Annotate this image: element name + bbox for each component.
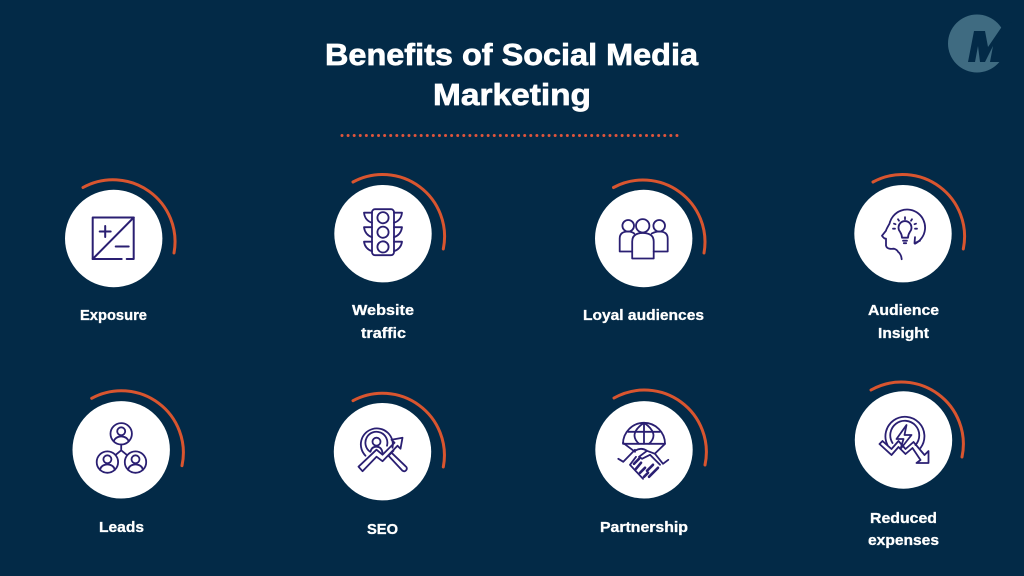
- item: Exposure: [65, 180, 175, 324]
- item: Reduced expenses: [855, 382, 963, 549]
- dotted divider: [342, 134, 677, 137]
- icon: falling cost chart: [880, 417, 928, 463]
- item: Reduced expenses: expenses: [868, 533, 939, 549]
- icon: plus minus: [93, 218, 134, 259]
- item: Website traffic: Website: [352, 303, 414, 319]
- item: Partnership: Partnership: [600, 520, 688, 536]
- icon: globe and handshake: [618, 423, 668, 479]
- item: SEO: [334, 393, 444, 538]
- item: Partnership: [595, 390, 706, 536]
- item: Loyal audiences: [583, 180, 705, 324]
- item: Reduced expenses: Reduced: [870, 511, 937, 527]
- item: Loyal audiences: Loyal audiences: [583, 308, 704, 324]
- title: Benefits of Social Media: [325, 37, 699, 72]
- item: SEO: SEO: [367, 522, 398, 538]
- item: Leads: [72, 391, 183, 536]
- item: Website traffic: traffic: [361, 326, 406, 342]
- item: Exposure: Exposure: [80, 308, 147, 324]
- item: Leads: Leads: [99, 520, 144, 536]
- icon: traffic light: [364, 209, 402, 255]
- icon: connected contacts: [97, 423, 146, 473]
- title: Marketing: [433, 77, 591, 112]
- item: Audience Insight: Audience: [868, 303, 939, 319]
- icon: target and growth arrow: [358, 428, 407, 471]
- item: Audience Insight: Insight: [878, 326, 929, 342]
- logo: [948, 14, 1012, 72]
- icon: head with bulb: [882, 210, 925, 259]
- item: Audience Insight: [854, 174, 965, 342]
- title: [325, 37, 699, 112]
- item: Website traffic: [334, 174, 445, 342]
- icon: people group: [620, 219, 668, 258]
